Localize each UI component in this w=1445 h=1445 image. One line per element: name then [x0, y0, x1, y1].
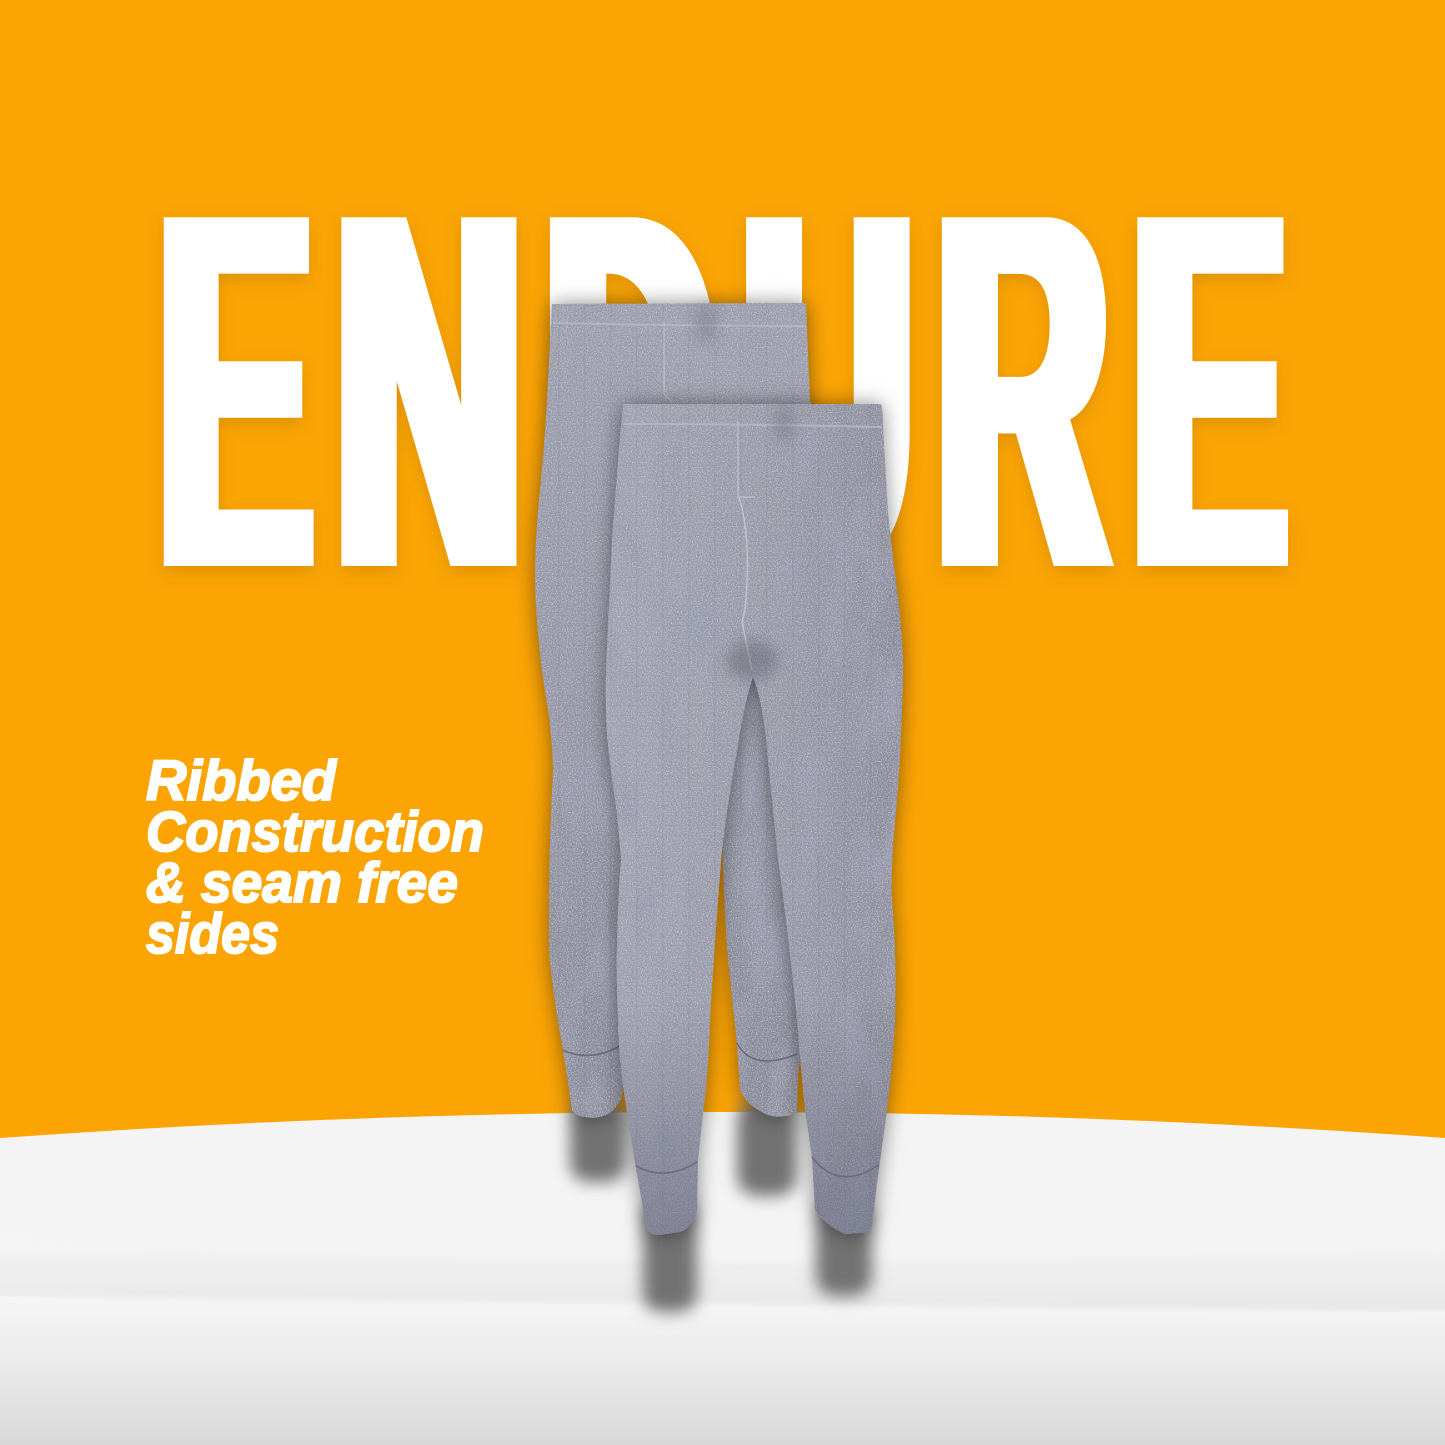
- pants: back pair: [535, 303, 835, 1118]
- title: ENDURE: D: [545, 108, 717, 674]
- white podium floor: [0, 1112, 1445, 1445]
- title: ENDURE: N: [335, 108, 523, 674]
- title: ENDURE: [160, 108, 1286, 674]
- pants: front pair: [606, 404, 903, 1235]
- text block: feature description: Construction: [146, 800, 484, 864]
- title: ENDURE: E: [160, 108, 312, 674]
- floor shadows beneath pant cuffs: [570, 1100, 872, 1312]
- text block: feature description: & seam free: [146, 851, 458, 915]
- text block: feature description: sides: [146, 902, 279, 966]
- title: ENDURE: U: [743, 108, 913, 674]
- text block: feature description: Ribbed: [146, 749, 337, 813]
- text block: feature description: [146, 749, 484, 966]
- title: ENDURE: R: [937, 108, 1108, 674]
